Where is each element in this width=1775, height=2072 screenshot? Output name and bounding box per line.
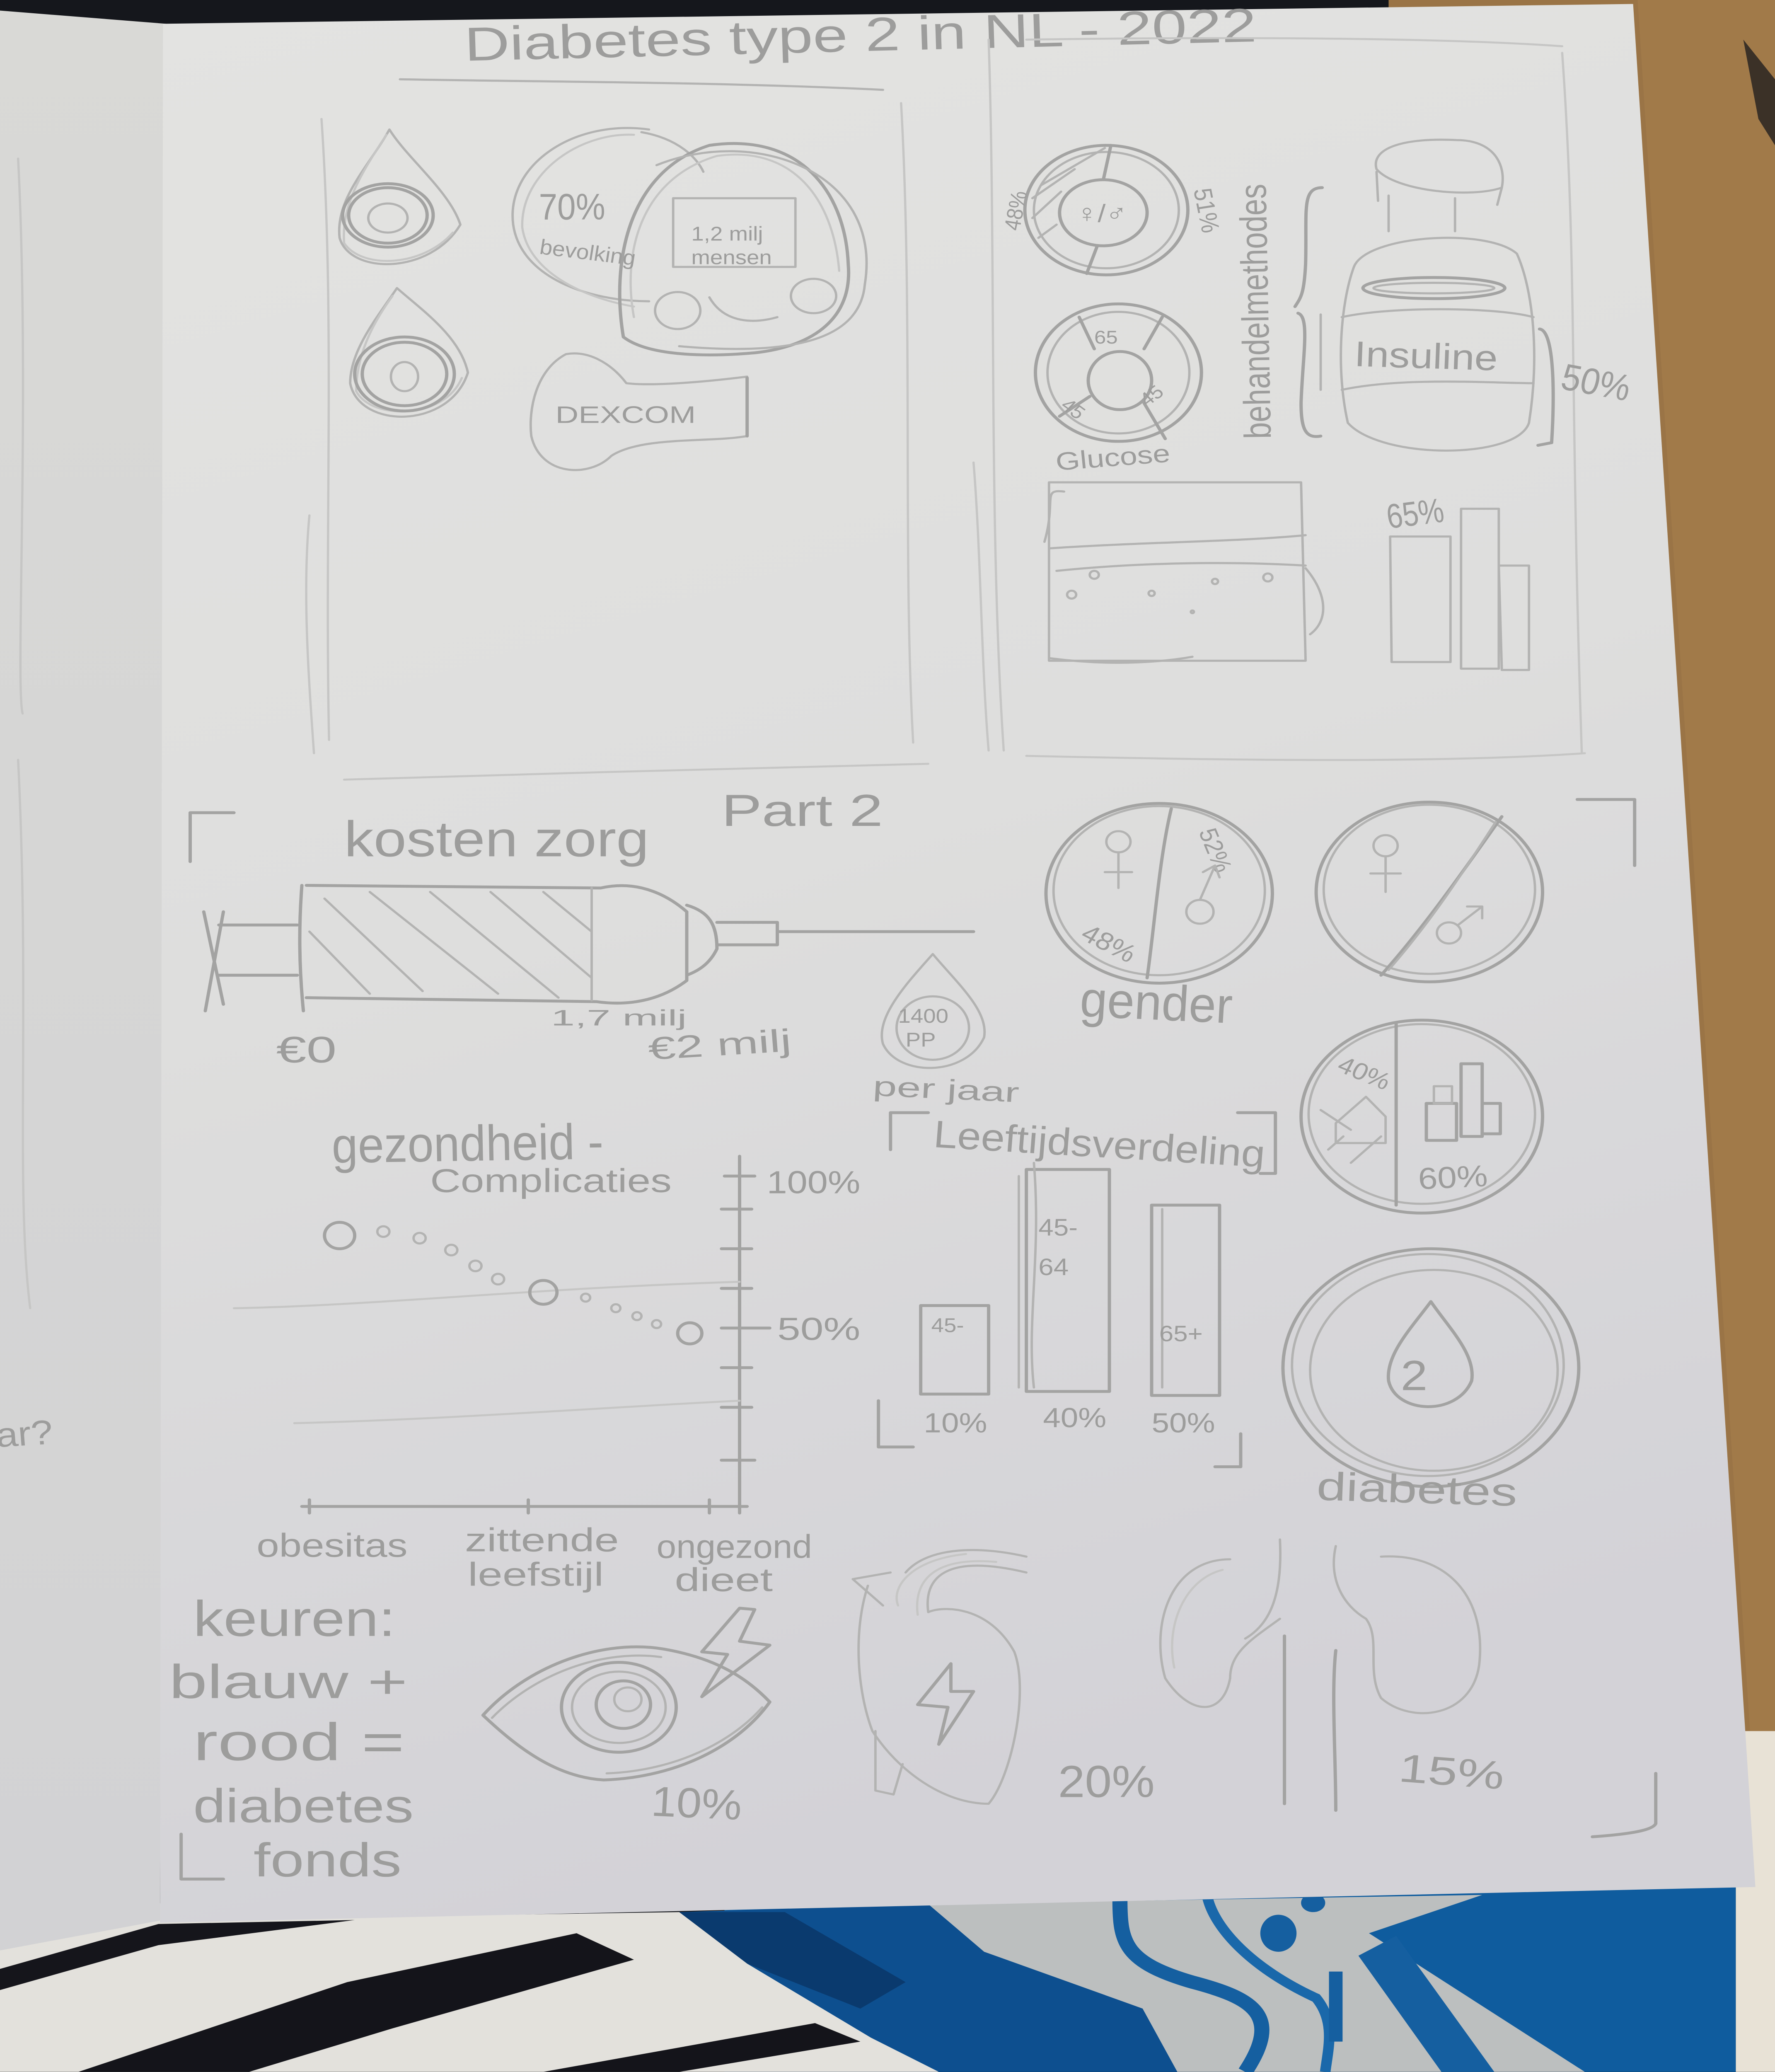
chart: gender donut: 48%	[999, 189, 1032, 232]
chart: age bars: 45-	[931, 1314, 964, 1336]
chart: gender donut: 51%	[1188, 186, 1225, 235]
label: 50%: 50%	[1557, 356, 1635, 409]
icon: sugar cube box	[1045, 482, 1323, 663]
icon: Dexcom sensor: DEXCOM	[556, 402, 696, 428]
text: 1,2 mil mensen: 1,2 milj	[691, 223, 763, 245]
chart: gender circle: 48%	[1076, 918, 1142, 968]
label: 65%: 65%	[1383, 491, 1446, 536]
chart: gender circle: 52%	[1193, 825, 1238, 876]
label: insuline: Insuline	[1354, 334, 1499, 378]
label: gender: gender	[1079, 971, 1234, 1034]
chart: health complications dot chart: zittende	[465, 1522, 619, 1559]
label: glucose: Glucose	[1054, 439, 1171, 476]
heading: gezondheid complicaties: gezondheid -	[331, 1113, 604, 1174]
icon: drop with glucose ring 2	[350, 288, 468, 417]
chart: diabetes badge: 2	[1401, 1352, 1427, 1399]
callout: cost per person drop: per jaar	[872, 1071, 1020, 1109]
chart: health complications dot chart: ongezond	[657, 1529, 812, 1565]
note: colours: keuren:	[193, 1590, 395, 1647]
label: diabetes: diabetes	[1316, 1464, 1518, 1515]
title	[400, 0, 1257, 90]
panel: part 1 right frame	[974, 38, 1635, 760]
note: colours: rood =	[193, 1713, 404, 1772]
chart: health complications dot chart: 50%	[777, 1312, 860, 1347]
chart: lifestyle circle: 40%	[1333, 1051, 1395, 1095]
chart: age bars: 64	[1038, 1254, 1069, 1280]
chart: age bars: 50%	[1152, 1408, 1215, 1439]
chart: health complications dot chart	[234, 1113, 860, 1598]
chart: health complications dot chart: dieet	[675, 1561, 773, 1598]
chart: diabetes badge	[1283, 1249, 1579, 1515]
label: behandelmethodes	[1232, 184, 1322, 439]
note: colours	[169, 1590, 414, 1887]
icon: glucose meter blob with text: mensen	[691, 247, 772, 269]
icon: glucose meter blob with text	[513, 128, 867, 355]
icon: drop with glucose ring 1	[339, 129, 460, 264]
chart: split gender circle	[1316, 802, 1543, 982]
title: Diabetes type 2 in NL - 2022	[464, 0, 1257, 71]
faint show-through lines on left page	[0, 159, 54, 1455]
heading: gezondheid complicaties: Complicaties	[430, 1162, 672, 1199]
label: 20%: 20%	[1058, 1757, 1155, 1807]
chart: age bars: 65+	[1159, 1321, 1203, 1346]
left notebook page	[0, 11, 166, 1951]
label: euro 2 miljoen: €2 milj	[647, 1023, 793, 1067]
chart: age bars: 40%	[1043, 1402, 1106, 1433]
chart: health complications dot chart: leefstijl	[468, 1556, 604, 1593]
chart: gender donut: ♀/♂	[1076, 199, 1127, 228]
chart: lifestyle circle: 60%	[1417, 1159, 1489, 1196]
icon: eye with lightning	[483, 1608, 770, 1829]
chart: three bars	[1383, 491, 1529, 670]
callout: cost per person drop: 1400	[898, 1005, 948, 1027]
label: 15%: 15%	[1397, 1745, 1507, 1798]
icon: glucose meter blob with text: bevolking	[538, 235, 638, 270]
text: 70% bevolking: 70%	[539, 186, 605, 228]
note: colours: fonds	[254, 1834, 401, 1887]
heading: kosten zorg: kosten zorg	[344, 811, 649, 867]
part 2 brackets	[190, 799, 1656, 1837]
label: 10%: 10%	[650, 1778, 743, 1829]
icon: insulin bottle	[1321, 140, 1635, 450]
chart: glucose donut	[1035, 304, 1202, 476]
callout: cost per person drop: PP	[906, 1029, 936, 1051]
chart: gender circle	[1046, 804, 1272, 1034]
icon: heart with lightning	[853, 1550, 1155, 1807]
label: behandelmethodes: behandelmethodes	[1232, 184, 1279, 439]
label: 1,7 miljoen: 1,7 milj	[551, 1005, 687, 1031]
icon: Dexcom sensor	[531, 353, 747, 470]
note: colours: diabetes	[193, 1779, 414, 1832]
label: euro 0: €0	[276, 1029, 336, 1070]
chart: glucose donut: 45	[1057, 395, 1089, 424]
chart: syringe cost bar	[204, 885, 974, 1070]
chart: glucose donut: 45	[1135, 381, 1168, 410]
callout: cost per person drop	[872, 954, 1020, 1109]
icon: kidneys	[1161, 1539, 1507, 1811]
note: colours: blauw +	[169, 1655, 408, 1709]
chart: lifestyle circle	[1301, 1020, 1543, 1213]
chart: age bars: 10%	[924, 1408, 987, 1439]
chart: health complications dot chart: 100%	[767, 1165, 860, 1200]
chart: age bars	[878, 1163, 1241, 1467]
chart: age bars: 45-	[1038, 1214, 1078, 1241]
chart: glucose donut: 65	[1094, 327, 1118, 348]
panel: part 1 left frame	[306, 103, 928, 779]
heading: gezondheid complicaties	[331, 1113, 672, 1199]
label: part 2: Part 2	[721, 785, 883, 835]
heading: leeftijdsverdeling: Leeftijdsverdeling	[932, 1113, 1267, 1176]
chart: gender donut	[999, 145, 1225, 275]
chart: health complications dot chart: obesitas	[256, 1527, 408, 1564]
